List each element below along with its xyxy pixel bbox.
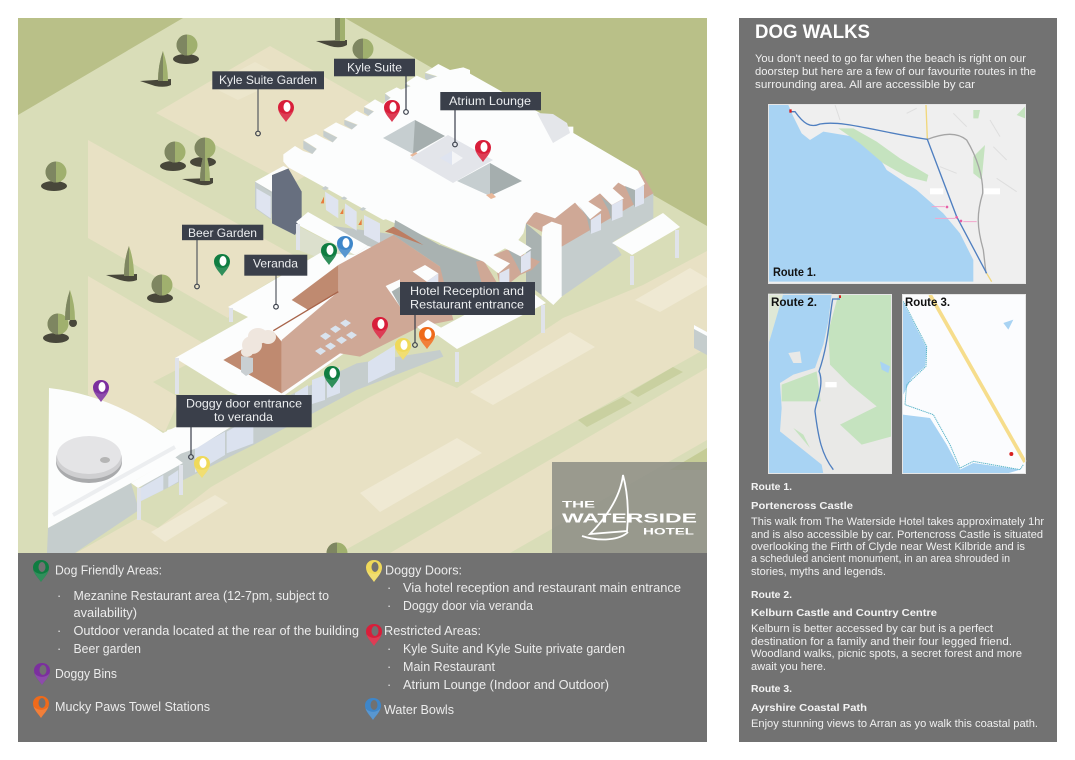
panel: hotel isometric map bbox=[18, 18, 707, 564]
label: Veranda: Veranda bbox=[253, 256, 298, 270]
intro text: surrounding area. All are accessible by car bbox=[755, 79, 975, 91]
legend: dog friendly areas: Beer garden bbox=[74, 642, 141, 656]
legend: doggy doors bbox=[366, 560, 681, 613]
legend: dog friendly areas: availability) bbox=[74, 606, 137, 620]
legend: restricted areas bbox=[366, 624, 625, 692]
route 2 text: Route 2. bbox=[751, 589, 792, 601]
legend: restricted areas: Kyle Suite and Kyle Suite private garden bbox=[403, 642, 625, 656]
central roof bbox=[326, 68, 638, 243]
legend: restricted areas: Main Restaurant bbox=[403, 660, 496, 674]
route label: Route 1. bbox=[773, 265, 816, 279]
label: Doggy door entrance to veranda: Doggy door entrance bbox=[186, 396, 302, 410]
panel: dog walks bbox=[739, 18, 1057, 742]
legend: doggy doors: Doggy door via veranda bbox=[403, 599, 533, 613]
intro text: doorstep but here are a few of our favourite routes in the bbox=[755, 66, 1036, 78]
legend: mucky paws towel stations: Mucky Paws Towel Stations bbox=[55, 700, 210, 714]
label: Hotel Reception and Restaurant entrance: Restaurant entrance bbox=[410, 298, 524, 312]
route label: Route 3. bbox=[905, 295, 950, 309]
map: route 2 bbox=[768, 294, 892, 474]
rear veranda bar bbox=[298, 227, 354, 256]
legend: dog friendly areas bbox=[33, 560, 359, 656]
legend: mucky paws towel stations bbox=[33, 696, 210, 718]
legend: water bowls bbox=[365, 698, 454, 720]
label: Kyle Suite Garden: Kyle Suite Garden bbox=[219, 73, 317, 87]
legend: dog friendly areas: Outdoor veranda located at the rear of the building bbox=[74, 624, 359, 638]
legend: restricted areas: · bbox=[387, 660, 391, 674]
legend: doggy doors: · bbox=[387, 581, 391, 595]
route 3 text bbox=[751, 683, 1038, 730]
map: route 3 bbox=[902, 294, 1026, 474]
legend: doggy doors: · bbox=[387, 599, 391, 613]
top roof, teeth and left block bbox=[255, 64, 470, 252]
reception canopy bbox=[417, 320, 441, 336]
label: Kyle Suite: Kyle Suite bbox=[347, 60, 402, 74]
logo: The Waterside Hotel: THE bbox=[562, 500, 595, 510]
label: Doggy door entrance to veranda: to veranda bbox=[214, 410, 273, 424]
building: lower wing and veranda bbox=[140, 212, 707, 502]
legend: doggy bins bbox=[34, 663, 117, 685]
legend: restricted areas: · bbox=[387, 642, 391, 656]
trees bbox=[41, 18, 374, 564]
label: Atrium Lounge bbox=[440, 92, 541, 147]
route 1 text: This walk from The Waterside Hotel takes approximately 1hr bbox=[751, 516, 1044, 528]
legend: doggy doors: Via hotel reception and restaurant main entrance bbox=[403, 581, 681, 595]
chimney and smoke bbox=[241, 356, 253, 376]
panel: legend bbox=[18, 553, 707, 742]
connection strip to wedge bbox=[167, 427, 230, 454]
legend: water bowls: Water Bowls bbox=[384, 703, 454, 717]
label: Veranda bbox=[244, 255, 307, 309]
logo: The Waterside Hotel: WATERSIDE bbox=[562, 510, 698, 526]
legend: doggy doors: Doggy Doors: bbox=[385, 564, 462, 578]
legend: doggy bins: Doggy Bins bbox=[55, 667, 117, 681]
legend: restricted areas: · bbox=[387, 678, 391, 692]
building: main wing bbox=[255, 64, 680, 305]
map: route 1 bbox=[768, 104, 1026, 284]
route 2 text: Kelburn Castle and Country Centre bbox=[751, 607, 937, 619]
route 1 text: a scheduled ancient monument, in an area shrouded in bbox=[751, 553, 1010, 565]
label: Hotel Reception and Restaurant entrance bbox=[400, 282, 535, 347]
route 1 text bbox=[751, 481, 1044, 578]
label: Doggy door entrance to veranda bbox=[176, 395, 312, 459]
route 3 text: Enjoy stunning views to Arran as yo walk this coastal path. bbox=[751, 718, 1038, 730]
route 1 text: overlooking the Firth of Clyde near West Kilbride and is bbox=[751, 541, 1025, 553]
route 2 text: Woodland walks, picnic spots, a secret forest and more bbox=[751, 648, 1022, 660]
dormers bbox=[413, 265, 438, 282]
front wall and windows bbox=[140, 350, 443, 502]
terracotta roof bbox=[223, 220, 460, 393]
legend: dog friendly areas: Dog Friendly Areas: bbox=[55, 564, 162, 578]
rear canopy bbox=[612, 213, 680, 255]
route 2 text: destination for a family and their four legged friend. bbox=[751, 636, 1012, 648]
logo: The Waterside Hotel: HOTEL bbox=[643, 526, 695, 536]
atrium courtyards bbox=[383, 120, 415, 155]
skylights bbox=[315, 320, 357, 355]
legend: restricted areas: Atrium Lounge (Indoor and Outdoor) bbox=[403, 678, 609, 692]
legend: restricted areas: Restricted Areas: bbox=[384, 624, 481, 638]
map pins bbox=[93, 100, 491, 478]
label: Atrium Lounge: Atrium Lounge bbox=[449, 94, 531, 108]
logo: The Waterside Hotel bbox=[552, 462, 707, 553]
legend: dog friendly areas: · bbox=[57, 624, 61, 638]
route 1 text: stories, myths and legends. bbox=[751, 566, 886, 578]
intro text: You don't need to go far when the beach is right on our bbox=[755, 53, 1026, 65]
label: Kyle Suite bbox=[334, 59, 415, 114]
right-hand wall and roof slopes bbox=[440, 127, 653, 305]
intro text bbox=[755, 53, 1036, 91]
heading: dog walks: DOG WALKS bbox=[755, 22, 870, 43]
legend: dog friendly areas: Mezanine Restaurant area (12-7pm, subject to bbox=[74, 589, 329, 603]
route 2 text: await you here. bbox=[751, 661, 826, 673]
route 3 text: Ayrshire Coastal Path bbox=[751, 702, 867, 714]
legend: dog friendly areas: · bbox=[57, 642, 61, 656]
route label: Route 2. bbox=[771, 295, 817, 309]
legend: dog friendly areas: · bbox=[57, 589, 61, 603]
white pillar bbox=[542, 222, 562, 305]
route 2 text bbox=[751, 589, 1022, 673]
route 2 text: Kelburn is better accessed by car but is a perfect bbox=[751, 623, 993, 635]
label: Kyle Suite Garden bbox=[212, 71, 324, 136]
route 1 text: Route 1. bbox=[751, 481, 792, 493]
route 3 text: Route 3. bbox=[751, 683, 792, 695]
label: Beer Garden bbox=[182, 225, 263, 289]
route 1 text: Portencross Castle bbox=[751, 500, 853, 512]
label: Beer Garden: Beer Garden bbox=[188, 226, 257, 240]
route 1 text: and is also accessible by car. Portencross Castle is situated bbox=[751, 529, 1043, 541]
label: Hotel Reception and Restaurant entrance: Hotel Reception and bbox=[410, 284, 524, 298]
building: curved wedge with roof disc bbox=[47, 388, 183, 553]
veranda roof bbox=[175, 246, 371, 395]
